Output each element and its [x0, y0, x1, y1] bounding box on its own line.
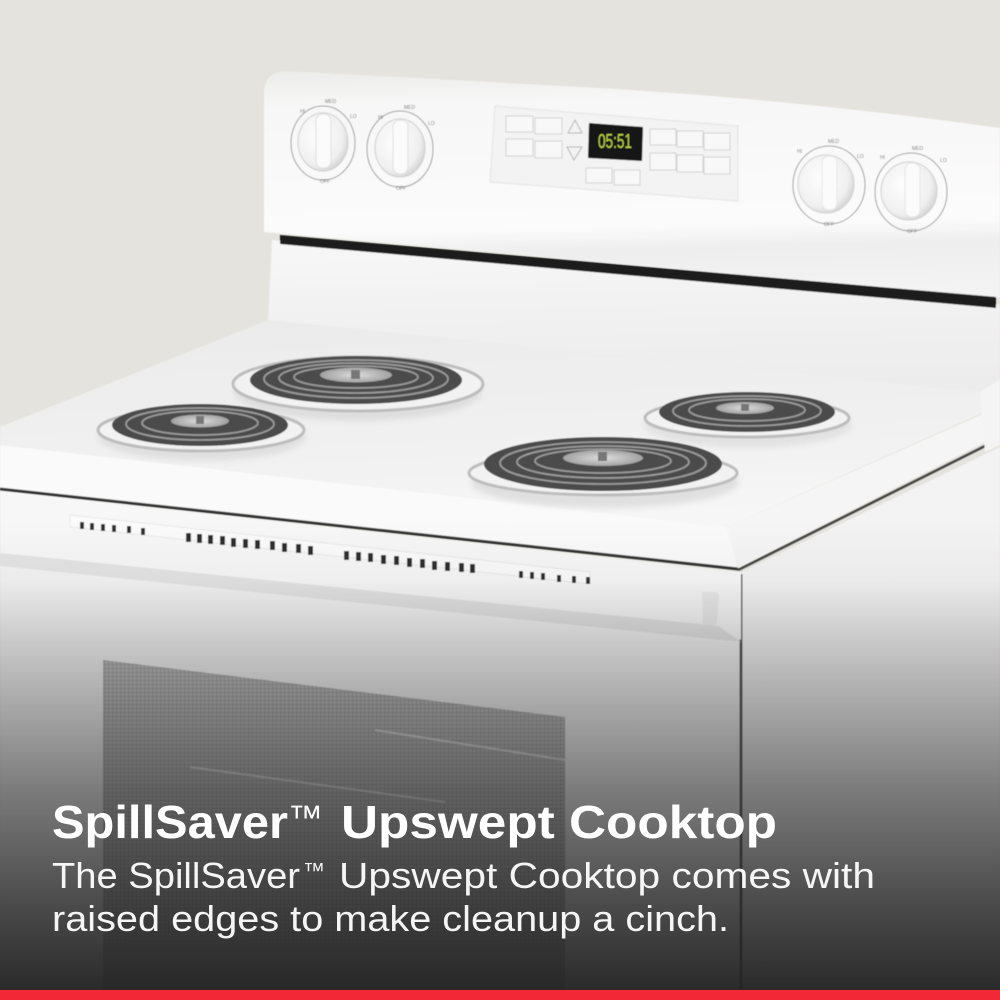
coil gaps — [500, 442, 706, 484]
cooktop front lip — [0, 445, 738, 568]
door front edge line — [740, 574, 742, 990]
oven door — [0, 555, 741, 990]
pad buttons — [506, 116, 730, 185]
knob 1 dial arc — [291, 106, 355, 180]
vent group 1 — [80, 522, 145, 535]
knob 2 body — [375, 119, 425, 177]
knob 4 — [875, 146, 947, 235]
knob 1 grip — [316, 114, 331, 168]
coil gaps — [673, 396, 821, 426]
centre pan — [320, 368, 392, 382]
centre stud — [196, 416, 204, 424]
burner: front right — [469, 437, 739, 508]
handle underside shadow — [0, 553, 741, 642]
digital display — [588, 123, 643, 161]
dark gradient overlay — [0, 520, 1000, 990]
centre stud — [351, 370, 360, 379]
heading: SpillSaver — [52, 796, 288, 848]
clock digits: 05:51 — [598, 131, 632, 153]
knob 3 labels: HI — [797, 149, 802, 155]
description line 1 — [52, 855, 875, 896]
knob 1 labels: MED — [325, 99, 336, 105]
knob 4 dial arc — [875, 153, 947, 231]
chrome drip ring — [645, 399, 849, 437]
knob 4 labels: LO — [940, 158, 947, 164]
drip shadow — [98, 413, 306, 461]
knob 4 labels: MED — [912, 146, 924, 152]
knob 1 labels: LO — [350, 114, 357, 120]
coil gaps — [264, 360, 448, 398]
centre stud — [741, 404, 749, 411]
drip shadow — [644, 402, 852, 448]
knob 2 labels: MED — [404, 105, 416, 111]
centre pan — [563, 450, 643, 466]
knob 1 — [291, 99, 357, 185]
coil element — [250, 356, 462, 404]
coil gaps — [126, 408, 274, 440]
knob 3 labels — [797, 139, 864, 228]
door handle strip — [0, 491, 741, 640]
knob 3 grip — [822, 156, 837, 210]
vent group 2 — [186, 533, 313, 555]
knob 1 labels: HI — [300, 109, 305, 115]
knob 3 labels: LO — [857, 154, 864, 160]
knob 1 labels — [300, 99, 357, 185]
vent group 4 — [519, 571, 590, 584]
description line 1: The SpillSaver — [52, 855, 300, 896]
drip shadow — [471, 456, 739, 508]
embossed vent strip — [70, 515, 590, 584]
centre pan — [716, 402, 774, 414]
knob 2 labels: HI — [378, 115, 383, 121]
cooktop seam shadows — [0, 446, 985, 570]
knob 2 grip — [393, 120, 408, 174]
knob 3 — [793, 139, 865, 228]
heading: Upswept Cooktop — [341, 796, 777, 848]
chrome drip ring — [469, 451, 737, 495]
heading — [52, 796, 777, 848]
coil element — [112, 404, 288, 446]
burner: front left — [98, 404, 306, 461]
electronic control pad — [490, 106, 738, 201]
knob 2 labels: OFF — [396, 186, 406, 192]
arrow buttons — [567, 120, 582, 160]
knob 2 labels: LO — [428, 121, 435, 127]
control panel — [264, 71, 1000, 298]
burner: back right — [644, 392, 852, 448]
description text — [52, 855, 875, 939]
knob 1 labels: OFF — [320, 179, 330, 185]
knob 2 labels — [378, 105, 435, 192]
oven window mesh — [103, 660, 565, 990]
coil element — [484, 437, 722, 491]
vent slots — [80, 522, 590, 584]
red footer bar — [0, 990, 1000, 1000]
cooktop right lip — [727, 413, 985, 568]
knob 3 labels: OFF — [824, 222, 834, 228]
cooktop surface — [0, 320, 1000, 527]
knob 4 body — [881, 162, 937, 220]
oven rack lines — [190, 730, 565, 802]
knob 3 dial arc — [793, 146, 865, 224]
description line 2: raised edges to make cleanup a cinch. — [52, 898, 729, 939]
pad background — [490, 106, 738, 201]
knob 3 labels: MED — [828, 139, 840, 145]
black slit under panel — [280, 235, 996, 308]
chrome drip ring — [98, 409, 304, 451]
centre stud — [598, 452, 607, 461]
heading: ™ — [288, 799, 323, 837]
vent group 3 — [344, 551, 475, 573]
burner: back left — [233, 356, 483, 421]
coil element — [659, 392, 835, 432]
knob 2 — [367, 105, 435, 192]
knob 4 grip — [905, 163, 920, 217]
side panel of range — [741, 447, 1000, 990]
centre pan — [171, 414, 229, 428]
knob 2 dial arc — [367, 111, 433, 187]
backsplash corner piece — [980, 380, 1000, 452]
knob 1 body — [298, 113, 348, 171]
handle right cap — [702, 592, 719, 625]
description line 1: ™ — [303, 858, 325, 883]
knob 4 labels — [880, 146, 947, 235]
chrome drip ring — [233, 357, 483, 411]
knob 3 body — [798, 155, 854, 213]
knob 4 labels: OFF — [907, 229, 917, 235]
knob 4 labels: HI — [880, 155, 885, 161]
drip shadow — [234, 363, 482, 421]
backsplash — [268, 240, 1000, 392]
description line 1: Upswept Cooktop comes with — [339, 855, 875, 896]
